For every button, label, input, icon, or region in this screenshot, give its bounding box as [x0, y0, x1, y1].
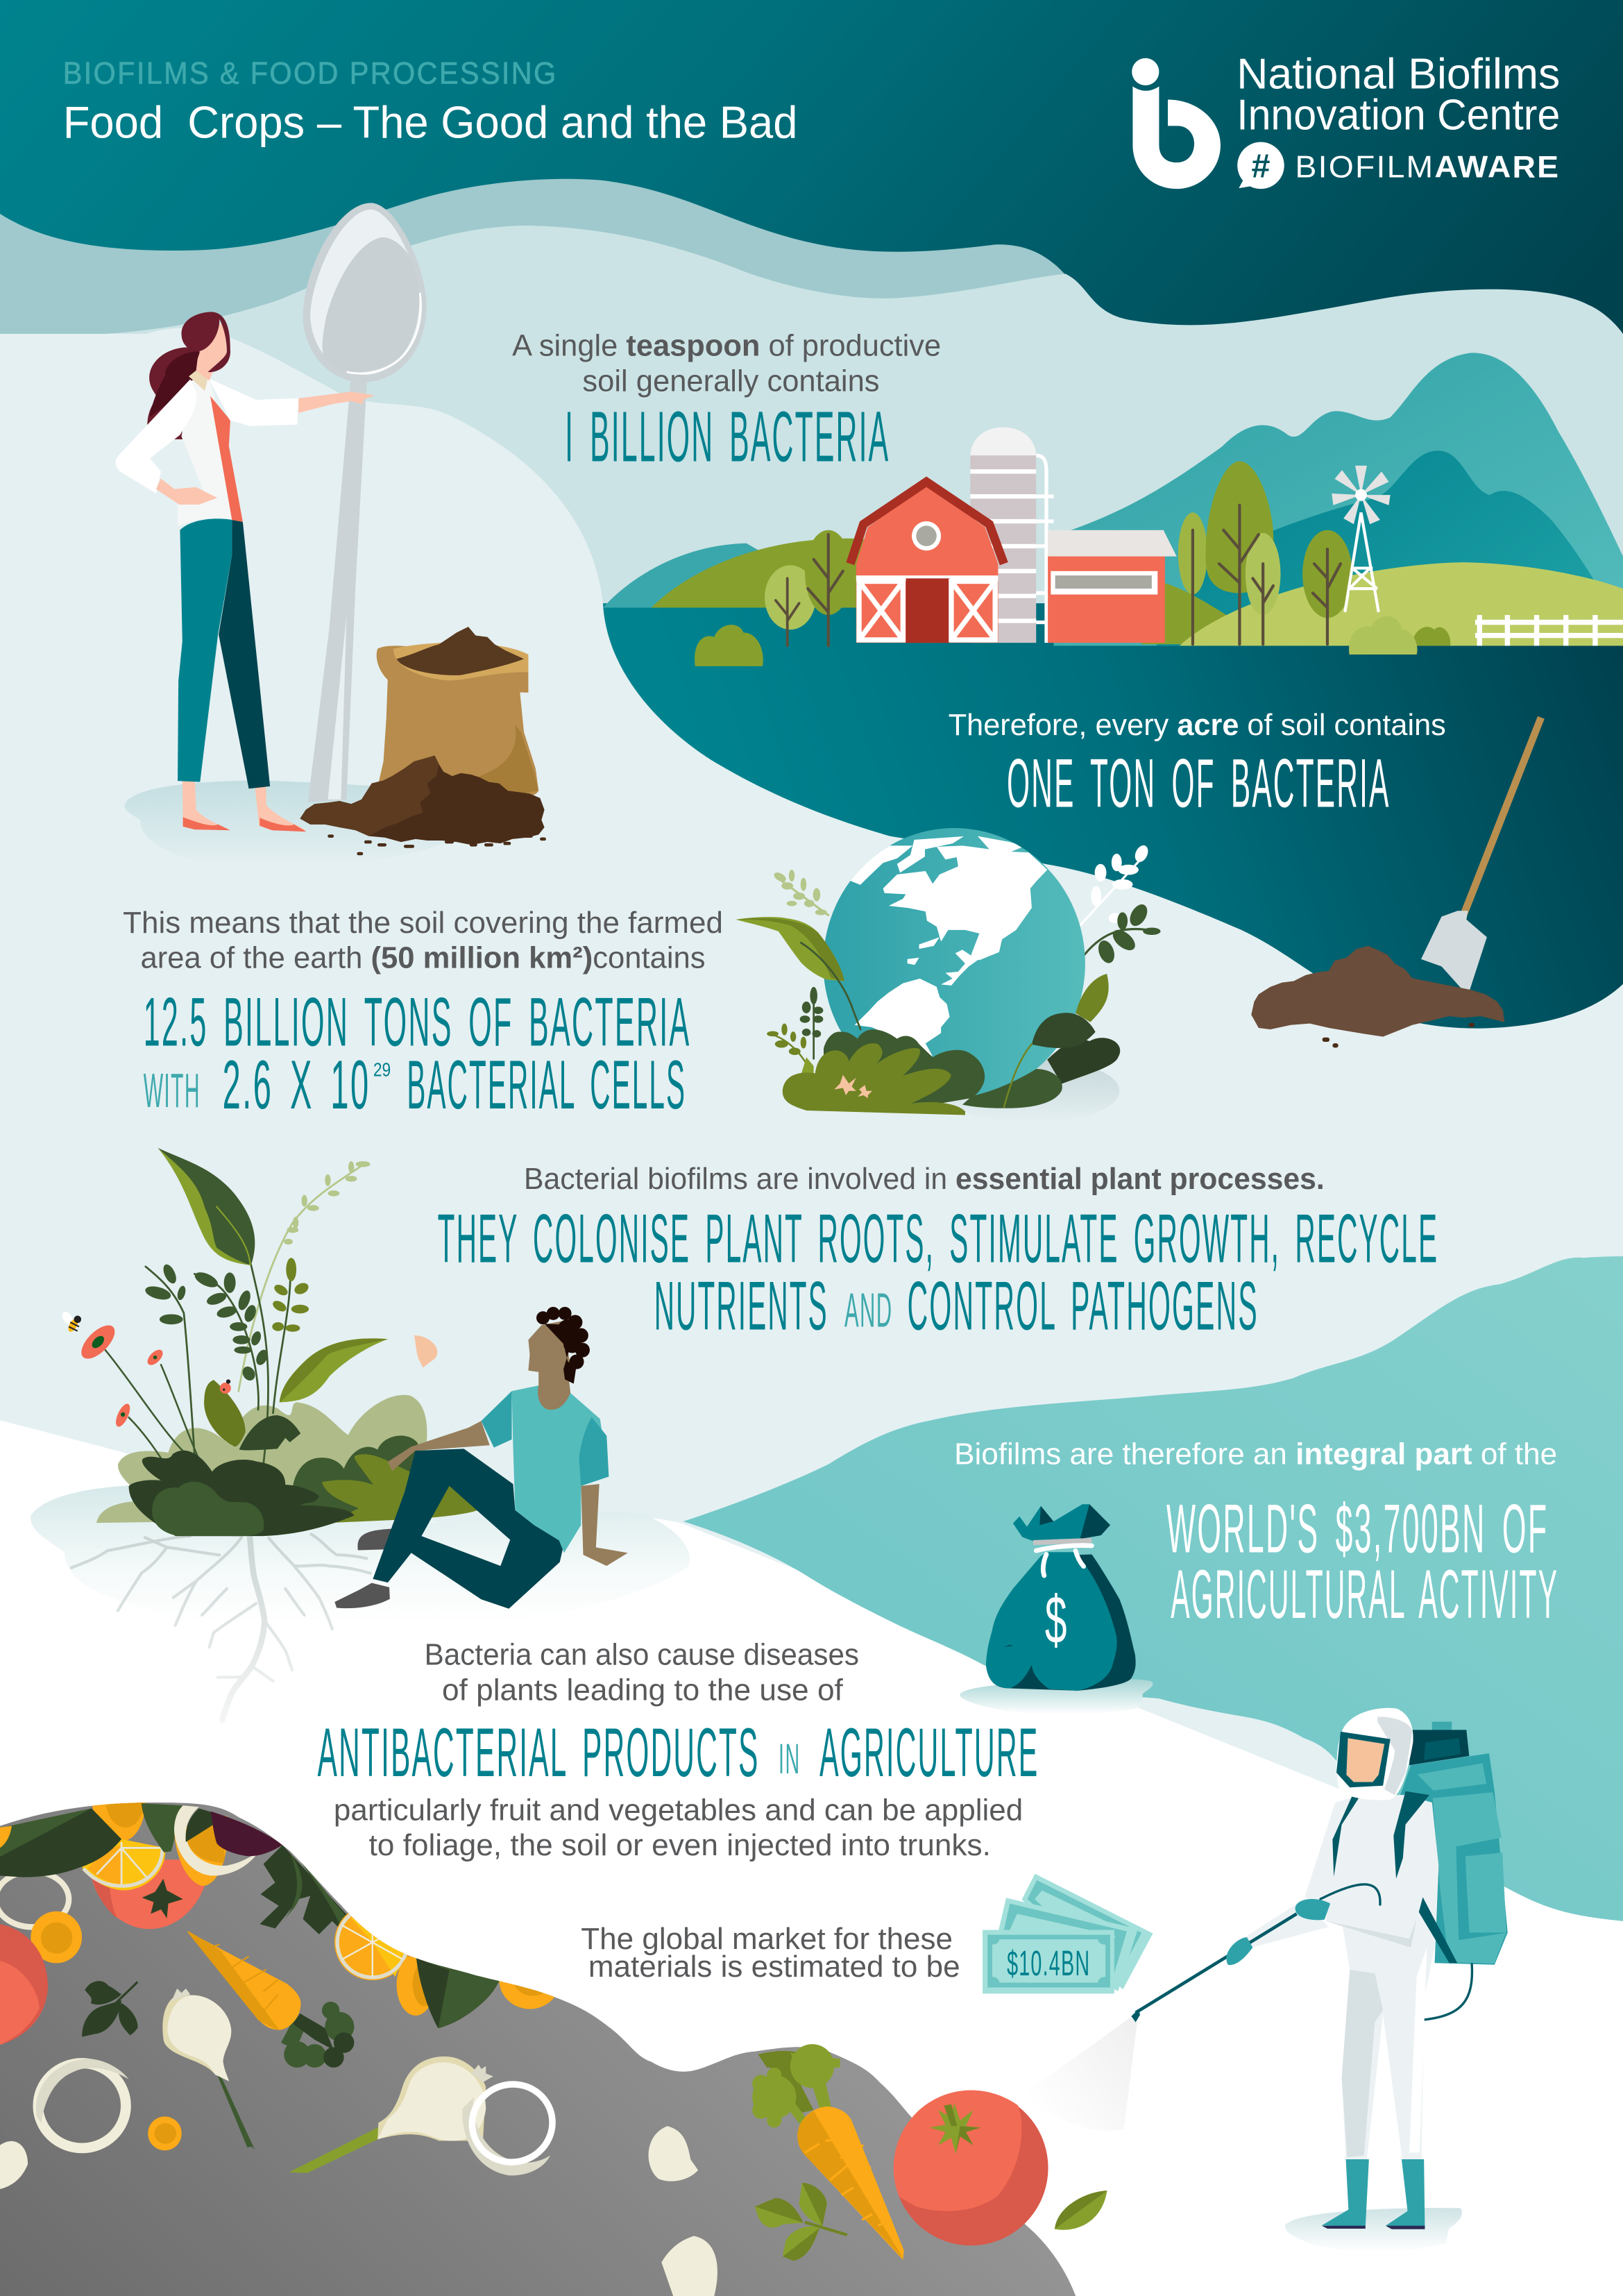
silo: [970, 428, 1054, 643]
money bag: [960, 1504, 1153, 1714]
right dark leaf: [1032, 1013, 1096, 1048]
banknotes: [983, 1874, 1153, 1993]
sack: [376, 627, 538, 798]
leaf top: [799, 2183, 827, 2226]
right olive bush: [322, 1454, 483, 1523]
panel: white lower area: [0, 1420, 1623, 2296]
orange flesh: [187, 1823, 225, 1863]
right mid bush: [291, 1435, 420, 1516]
carrot two: [752, 2044, 904, 2260]
hill: right olive: [1141, 583, 1238, 644]
text: biofilm processes: [438, 1163, 1438, 1345]
line 1: The global market for these: [581, 1923, 953, 1956]
flower stems: [105, 1350, 207, 1491]
band: light teal wave: [0, 226, 1623, 673]
carrot marks: [805, 2138, 890, 2226]
front inner: [992, 1939, 1105, 1983]
onion bulb one: [162, 1989, 255, 2150]
intro line: This means that the soil covering the farmed: [123, 906, 723, 940]
logo mark: [1132, 58, 1221, 189]
detail line: particularly fruit and vegetables and can be applied: [334, 1793, 1023, 1827]
center leaf: [204, 1380, 246, 1446]
intro line 2: of plants leading to the use of: [442, 1673, 844, 1707]
white sprig: [1080, 843, 1150, 925]
dark leaf edge: [260, 1845, 354, 1936]
windmill: [1332, 466, 1391, 612]
tank top: [1409, 1722, 1469, 1765]
onion ring top: [174, 1805, 260, 1876]
worker spraying: [1131, 1708, 1508, 2252]
hashtag bubble: #: [1252, 147, 1271, 185]
logo: [1132, 51, 1560, 189]
text: antibacterial: IN: [779, 1735, 801, 1782]
plant and man shadow: [31, 1485, 690, 1623]
nozzle: [1131, 2009, 1140, 2022]
neck and face: [196, 323, 227, 381]
tree: left olive: [805, 530, 852, 645]
mushrooms: [0, 2126, 717, 2296]
side barn: [1048, 530, 1177, 643]
wand: [1136, 1914, 1297, 2013]
face: [528, 1321, 571, 1374]
dark wedge: [186, 1808, 214, 1842]
soil: [1251, 946, 1504, 1037]
bush back: [824, 1029, 985, 1107]
coat body: [178, 378, 232, 526]
tomato star: [929, 2103, 980, 2154]
right olive leaf: [280, 1338, 388, 1402]
bag top shade: [1039, 1504, 1110, 1539]
barn window: [912, 521, 941, 550]
band: mid teal wave: [0, 179, 1069, 586]
middle note: [999, 1898, 1138, 1991]
globe shadow: [944, 1058, 1119, 1123]
stem: [1004, 1044, 1032, 1107]
text: antibacterial: [318, 1639, 1039, 1862]
butterfly: [414, 1335, 437, 1367]
ground shadow: [124, 780, 446, 867]
orange under ring: [174, 1816, 228, 1886]
blade: [1421, 911, 1487, 996]
trees: right group: [1178, 462, 1352, 644]
roots main: [222, 1536, 264, 1721]
hashtag text: BIOFILM AWARE: [1295, 150, 1560, 184]
text: BACTERIAL CELLS: [407, 1047, 686, 1124]
continents: [849, 836, 1047, 1056]
face: [1346, 1738, 1384, 1782]
leaf low: [783, 2227, 819, 2261]
orange disc right: [499, 1950, 561, 2009]
front note: [983, 1930, 1114, 1993]
text: I BILLION BACTERIA: [565, 396, 890, 477]
coat arm left: [116, 379, 196, 493]
shoes: [183, 817, 306, 832]
panel: teal wave: [683, 1256, 1623, 1921]
text: AGRICULTURE: [819, 1714, 1039, 1791]
onion ring lower left: [0, 1871, 69, 1927]
header background: [0, 0, 1623, 689]
right mid foliage: [962, 1069, 1062, 1108]
orange peel top: [92, 1801, 145, 1841]
bag body front: [986, 1552, 1117, 1691]
top: [210, 396, 243, 522]
pale bush: [96, 1395, 427, 1523]
headline: Food Crops – The Good and the Bad: [63, 96, 797, 147]
body: [188, 1932, 301, 2030]
intro line: Biofilms are therefore an integral part of the: [954, 1438, 1557, 1471]
kicker: BIOFILMS & FOOD PROCESSING: [63, 56, 558, 90]
far arm: [1246, 1899, 1329, 1948]
dark bush: [129, 1451, 354, 1536]
text: 12.5 BILLION TONS OF BACTERIA: [144, 984, 690, 1061]
woman with spoon: [116, 203, 545, 867]
hill: right light green: [1180, 562, 1623, 645]
intro line: Bacterial biofilms are involved in essential plant processes.: [524, 1163, 1325, 1196]
bulb: [377, 2062, 486, 2141]
intro line: A single teaspoon of productive: [512, 330, 941, 363]
pale fern: [239, 1161, 371, 1391]
small sprigs: [767, 987, 823, 1081]
suit: [1305, 1795, 1438, 2159]
back note: [1022, 1874, 1153, 1989]
olive sprig leaves: [271, 1258, 310, 1332]
bag cord: [1036, 1546, 1091, 1576]
tomato left: [0, 1924, 48, 2045]
suit highlight: [1409, 1948, 1427, 2152]
text: biofilm processes: AND: [844, 1283, 893, 1337]
hill: left olive: [652, 539, 878, 608]
intro line 2: soil generally contains: [582, 364, 880, 398]
tree: left light: [765, 565, 816, 645]
far shoe: [357, 1529, 392, 1551]
arm down: [581, 1484, 628, 1566]
dark centre leaf: [239, 1415, 300, 1450]
boots: [1322, 2159, 1425, 2229]
bee: [60, 1310, 81, 1333]
arm to spoon: [298, 391, 375, 413]
man sitting: [334, 1307, 628, 1609]
root hairs: [171, 1989, 190, 2002]
barn doors: [856, 575, 998, 643]
spray cloud: [1024, 2018, 1137, 2131]
dark leaf left: [0, 1808, 121, 1877]
lemon slice: [82, 1839, 165, 1891]
text: farmed area fact: [123, 906, 723, 1124]
orange disc left: [31, 1911, 82, 1963]
intro line: Bacteria can also cause diseases: [425, 1639, 859, 1672]
detail line 2: to foliage, the soil or even injected into trunks.: [368, 1829, 991, 1862]
near arm: [1326, 1858, 1428, 1948]
text: acre fact: [949, 709, 1446, 822]
stems: [146, 1265, 290, 1464]
roots branches: [71, 1535, 371, 1681]
straps: [1332, 1791, 1457, 1963]
fence: [1475, 615, 1623, 645]
right olive leaf: [1076, 974, 1109, 1022]
barn: [850, 428, 1177, 643]
tomato front: [894, 2091, 1022, 2211]
title: [63, 56, 797, 147]
shadow: [960, 1679, 1153, 1714]
globe illustration: [736, 828, 1161, 1123]
root hairs: [471, 2065, 493, 2082]
big tomato: [894, 2091, 1048, 2245]
big left leaf: [736, 917, 860, 1029]
orange flesh top: [105, 1801, 145, 1827]
gloves: [1226, 1899, 1330, 1965]
tomato base: [894, 2091, 1048, 2245]
exponent: 29: [373, 1059, 391, 1081]
globe: [823, 828, 1085, 1099]
illustration: farm landscape: [603, 353, 1623, 666]
sleeve right: [579, 1417, 609, 1486]
dark sprig: [1085, 902, 1161, 965]
intro line 2: area of the earth (50 million km²)contains: [140, 942, 706, 975]
centre leaf: [142, 1803, 183, 1852]
near shoe: [334, 1583, 390, 1608]
mountain: rear teal: [1054, 353, 1623, 645]
carrot one: [188, 1932, 354, 2068]
hashtag bubble: [1237, 142, 1284, 189]
logo name line 2: Innovation Centre: [1237, 92, 1560, 140]
leaf highlight: [278, 1852, 351, 1933]
mountain: front teal: [1156, 450, 1623, 645]
neck: [538, 1362, 570, 1410]
shovel and soil: [1251, 718, 1541, 1045]
tomato stalk: [142, 1879, 183, 1918]
greens: [281, 2002, 354, 2068]
body: [797, 2107, 904, 2260]
soil pile: [300, 756, 545, 854]
carrot shade: [797, 2111, 903, 2259]
big top leaf: [158, 1148, 255, 1265]
collar: [189, 371, 207, 391]
hill: left teal: [603, 543, 819, 608]
illustration: plant with roots: [60, 1148, 483, 1721]
text: global market: [581, 1923, 960, 1984]
purple veg: [211, 1812, 282, 1856]
arm raised: [388, 1421, 490, 1471]
text: integral part: [954, 1438, 1558, 1633]
stem: [216, 2073, 255, 2150]
hair top: [182, 312, 230, 372]
bush front: [783, 1043, 965, 1115]
bag tie: [1033, 1540, 1091, 1543]
ladybird: [220, 1379, 231, 1394]
backpack: [1400, 1753, 1508, 1965]
orange slice right: [334, 1904, 411, 1980]
stem: [289, 2123, 386, 2173]
text: teaspoon fact: [512, 330, 941, 477]
orange disc: [397, 1954, 436, 2016]
coat arm right: [210, 379, 298, 426]
visor: [1336, 1732, 1391, 1787]
line 2: materials is estimated to be: [588, 1950, 960, 1984]
bulb shade: [162, 1994, 231, 2082]
trousers: [178, 518, 232, 782]
legs skin: [182, 776, 306, 830]
intro line: Therefore, every acre of soil contains: [949, 709, 1446, 742]
stripes: [188, 1932, 278, 2029]
logo name: National Biofilms: [1237, 51, 1560, 99]
pants: [373, 1449, 564, 1609]
dollar sign: $: [1045, 1582, 1067, 1657]
bushes: [695, 616, 1450, 666]
onion ring one: [36, 2059, 129, 2148]
vegetables inside hill: [0, 1801, 561, 2045]
sleeve left: [481, 1391, 512, 1448]
hose front: [1320, 1884, 1380, 1905]
panel: dark lagoon: [586, 603, 1623, 1086]
grey vegetable hill: [0, 1803, 1076, 2296]
front dark bush: [152, 1482, 264, 1536]
flowers: [76, 1319, 165, 1428]
olive leaf small: [1055, 2191, 1107, 2230]
text: farmed area fact: 2.6 X 10: [223, 1047, 371, 1124]
flowers: [834, 1075, 872, 1098]
bulb shade: [377, 2057, 486, 2141]
handle: [1463, 718, 1541, 915]
pale sprig: [772, 870, 829, 915]
tomato top: [90, 1859, 210, 1929]
dark leaf right: [416, 1958, 500, 2028]
parsley one: [82, 1981, 138, 2037]
front border: [987, 1935, 1110, 1987]
hood: [1336, 1708, 1413, 1800]
spoon: [303, 203, 427, 802]
bag body dark: [986, 1554, 1136, 1691]
text: biofilm processes: NUTRIENTS: [654, 1268, 829, 1345]
amount: $10.4BN: [1007, 1943, 1090, 1983]
bag top: [1013, 1504, 1110, 1542]
hair: [536, 1307, 590, 1384]
hand on hip: [156, 478, 217, 505]
leaf left: [755, 2198, 804, 2228]
greens: [752, 2044, 840, 2127]
dark sprig leaves: [144, 1263, 270, 1383]
text: antibacterial: ANTIBACTERIAL PRODUCTS: [318, 1714, 760, 1791]
onion ring two: [462, 2075, 561, 2175]
stem: [805, 2222, 847, 2235]
tomato left front: [0, 1961, 40, 2045]
leg shade: [1342, 1970, 1383, 2157]
hair back: [147, 347, 205, 439]
bulb: [167, 1995, 231, 2082]
small orange: [148, 2116, 182, 2150]
onion bulb two: [289, 2057, 493, 2173]
right darkest foliage: [1047, 1038, 1120, 1084]
text: farmed area fact: WITH: [144, 1063, 201, 1117]
shirt: [512, 1385, 609, 1553]
barn roof: [850, 482, 1004, 564]
ground shadow: [1285, 2208, 1462, 2252]
barn body: [856, 484, 998, 643]
hose back: [1376, 1934, 1472, 2020]
parsley two: [755, 2183, 847, 2261]
